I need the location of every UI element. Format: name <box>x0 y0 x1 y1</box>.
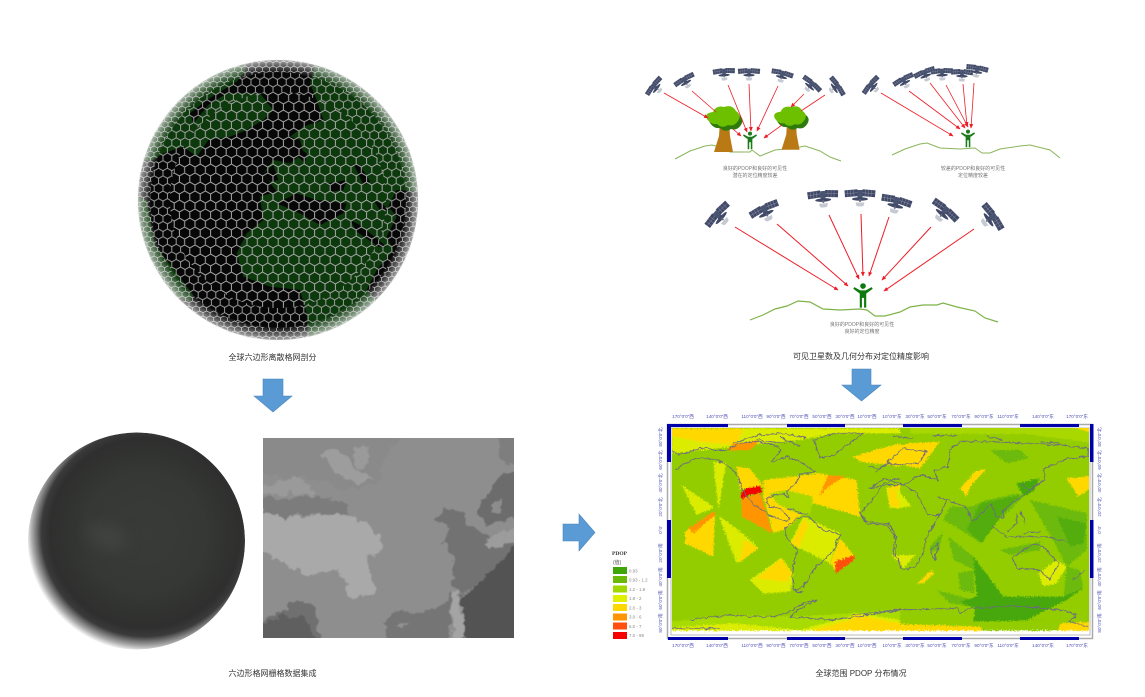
bottom axis labels: 10°0'0"东 <box>882 642 902 648</box>
caption: top-left scenario: 良好的PDOP和良好的可见性 <box>723 165 787 172</box>
panel: dark elevation globe <box>28 432 245 650</box>
legend: PDOP: 0.93 - 1.2 <box>629 578 648 582</box>
caption: bottom scenario: 良好的PDOP和良好的可见性 <box>830 321 894 328</box>
legend: PDOP: 1.8 - 2 <box>629 596 642 601</box>
caption: PDOP distribution: 全球范围 PDOP 分布情况 <box>816 668 906 678</box>
left axis labels: 80°0'0"北 <box>657 427 664 447</box>
right axis labels: 60°0'0"北 <box>1096 450 1103 470</box>
bottom axis labels: 30°0'0"西 <box>835 643 855 649</box>
caption: global hex grid: 全球六边形离散格网剖分 <box>228 352 316 362</box>
satellites <box>861 63 989 99</box>
top axis labels: 10°0'0"东 <box>882 413 902 419</box>
legend: PDOP: 1.2 - 1.8 <box>629 587 646 592</box>
top axis labels: 140°0'0"东 <box>1032 413 1054 419</box>
raster regions <box>263 438 514 638</box>
bottom axis labels: 30°0'0"东 <box>905 642 925 648</box>
right axis labels: 20°0'0"南 <box>1096 543 1102 563</box>
top axis labels: 10°0'0"西 <box>857 414 877 420</box>
ground line <box>675 145 841 161</box>
satellites <box>704 189 1005 237</box>
bottom axis labels: 170°0'0"东 <box>1066 642 1088 648</box>
caption: top-right scenario: 定位精度较差 <box>958 172 988 179</box>
caption: bottom scenario: 良好的定位精度 <box>844 328 880 335</box>
top axis labels: 90°0'0"东 <box>974 413 994 419</box>
left axis labels: 80°0'0"南 <box>657 613 663 633</box>
top axis labels: 30°0'0"西 <box>835 414 855 420</box>
bottom axis labels: 50°0'0"西 <box>812 643 832 649</box>
top axis labels: 90°0'0"西 <box>766 414 786 420</box>
panel: hexagonal discrete global grid globe <box>137 59 419 341</box>
legend: PDOP: PDOP <box>612 551 628 557</box>
top axis labels: 110°0'0"东 <box>997 413 1019 419</box>
panel: global PDOP map <box>657 413 1103 649</box>
left axis labels: 60°0'0"北 <box>657 450 664 470</box>
caption: top-left scenario: 潜在的定位精度较差 <box>732 172 778 179</box>
top axis labels: 170°0'0"西 <box>672 414 694 420</box>
hexagon grid overlay <box>137 59 419 341</box>
caption: visible satellites: 可见卫星数及几何分布对定位精度影响 <box>793 351 929 361</box>
arrow: right to PDOP map <box>563 514 595 551</box>
caption: top-left scenario <box>723 165 787 179</box>
bottom axis labels: 10°0'0"西 <box>857 643 877 649</box>
coastlines western hemisphere <box>672 433 900 628</box>
left axis labels: 20°0'0"北 <box>657 497 664 517</box>
legend: PDOP: (值) <box>613 559 622 566</box>
left axis labels: 60°0'0"南 <box>657 590 663 610</box>
PDOP zones eastern hemisphere <box>853 423 1093 637</box>
left axis labels: 0°0' <box>658 526 663 534</box>
legend: PDOP: 2.0 - 3 <box>629 606 642 610</box>
bottom axis labels: 110°0'0"东 <box>997 642 1019 648</box>
bottom axis labels: 170°0'0"西 <box>672 643 694 649</box>
panel: satellite geometry top right <box>861 63 1060 158</box>
top axis labels: 70°0'0"东 <box>951 413 971 419</box>
caption: bottom scenario <box>830 321 894 335</box>
legend: PDOP <box>612 551 648 639</box>
coastlines eastern hemisphere <box>853 435 1088 627</box>
bottom axis labels: 110°0'0"西 <box>741 643 763 649</box>
receiver figure <box>961 130 975 147</box>
signal arrows <box>735 214 974 291</box>
top axis labels: 30°0'0"东 <box>905 413 925 419</box>
signal arrows <box>664 84 825 138</box>
bottom axis labels <box>672 642 1088 649</box>
right axis labels: 60°0'0"南 <box>1096 590 1102 610</box>
receiver figure <box>743 132 757 149</box>
bottom axis labels: 90°0'0"西 <box>766 643 786 649</box>
top axis labels <box>672 413 1088 420</box>
right axis labels: 40°0'0"北 <box>1096 473 1103 493</box>
top axis labels: 50°0'0"西 <box>812 414 832 420</box>
ground line <box>750 301 998 322</box>
right axis labels: 40°0'0"南 <box>1096 567 1102 587</box>
caption: raster integration: 六边形格网栅格数据集成 <box>228 668 316 678</box>
legend: PDOP: 0.93 <box>629 568 638 574</box>
bottom axis labels: 140°0'0"西 <box>706 643 728 649</box>
arrow: down to raster integration <box>254 379 292 412</box>
bottom axis labels: 50°0'0"东 <box>927 642 947 648</box>
top axis labels: 140°0'0"西 <box>706 414 728 420</box>
right axis labels: 0°0' <box>1097 526 1102 534</box>
caption: top-right scenario <box>941 165 1005 179</box>
top axis labels: 110°0'0"西 <box>741 414 763 420</box>
top axis labels: 70°0'0"西 <box>789 414 809 420</box>
legend: PDOP: 3.0 - 6 <box>629 614 642 620</box>
globe continents <box>135 57 427 343</box>
panel: satellite geometry bottom <box>704 189 1005 322</box>
legend: PDOP: 6.0 - 7 <box>629 624 642 629</box>
trees <box>706 106 809 152</box>
right axis labels: 20°0'0"北 <box>1096 497 1103 517</box>
panel: grey raster terrain <box>263 438 514 638</box>
arrow: down to PDOP map <box>842 369 881 401</box>
signal arrows <box>881 83 974 136</box>
top axis labels: 50°0'0"东 <box>927 413 947 419</box>
receiver figure <box>853 283 873 308</box>
map data surface <box>672 423 1093 637</box>
bottom axis labels: 70°0'0"东 <box>951 642 971 648</box>
left axis labels: 40°0'0"南 <box>657 567 663 587</box>
legend: PDOP: 7.0 - 99 <box>629 633 644 638</box>
right axis labels: 80°0'0"南 <box>1096 613 1102 633</box>
left axis labels <box>657 427 664 633</box>
left axis labels: 40°0'0"北 <box>657 473 664 493</box>
satellites <box>644 67 846 101</box>
PDOP zones western hemisphere <box>672 428 900 637</box>
caption: top-right scenario: 较差的PDOP和良好的可见性 <box>941 165 1005 172</box>
map frame <box>667 424 1094 640</box>
bottom axis labels: 90°0'0"东 <box>974 642 994 648</box>
bottom axis labels: 140°0'0"东 <box>1032 642 1054 648</box>
panel: satellite geometry top left <box>644 67 846 161</box>
left axis labels: 20°0'0"南 <box>657 543 663 563</box>
globe terrain <box>100 532 115 542</box>
right axis labels <box>1096 427 1103 633</box>
right axis labels: 80°0'0"北 <box>1096 427 1103 447</box>
bottom axis labels: 70°0'0"西 <box>789 643 809 649</box>
ground line <box>892 143 1060 158</box>
top axis labels: 170°0'0"东 <box>1066 413 1088 419</box>
